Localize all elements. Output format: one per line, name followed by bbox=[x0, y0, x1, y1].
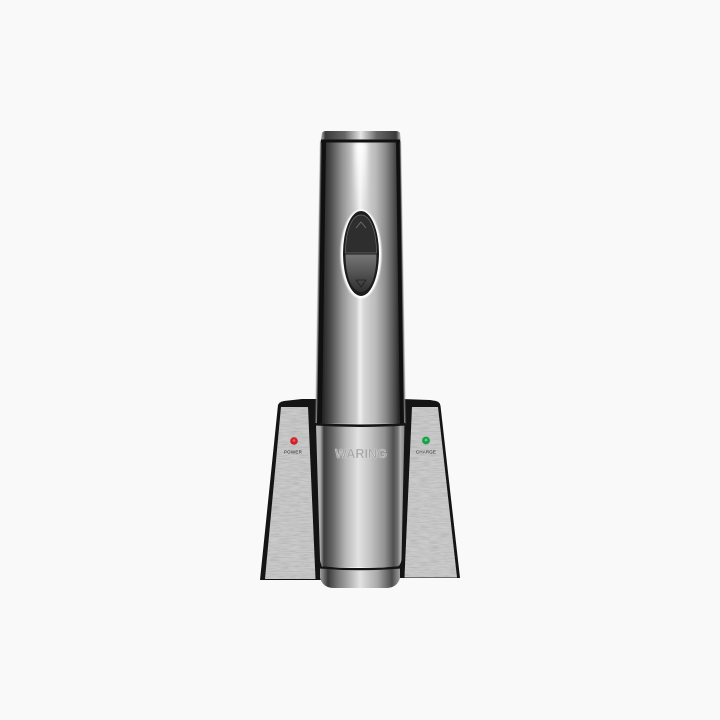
power label: POWER bbox=[284, 450, 302, 454]
lower button half bbox=[346, 254, 376, 292]
up arrow bbox=[356, 222, 366, 228]
power indicator light bbox=[290, 437, 298, 445]
left base black housing bbox=[260, 399, 322, 580]
lower steel sleeve bbox=[316, 424, 404, 567]
right base black housing bbox=[398, 399, 460, 578]
down arrow bbox=[356, 280, 366, 287]
button surround bbox=[343, 211, 379, 296]
left black edge bbox=[317, 142, 326, 424]
left charging base bbox=[260, 399, 322, 580]
charge label: CHARGE bbox=[416, 450, 436, 454]
oval control button bbox=[340, 210, 382, 298]
upper button half bbox=[346, 215, 376, 253]
charge indicator light bbox=[422, 437, 430, 444]
right base brushed plate bbox=[404, 407, 457, 578]
upper steel body bbox=[316, 141, 406, 424]
right black edge bbox=[396, 142, 404, 424]
foot ring bbox=[319, 566, 401, 588]
opener body bbox=[315, 131, 406, 588]
top highlight bbox=[354, 142, 367, 232]
right charging base bbox=[398, 399, 460, 578]
embossed brand name: WARING bbox=[335, 446, 387, 461]
top cap bbox=[320, 131, 401, 142]
sleeve joint line bbox=[315, 423, 406, 427]
left base brushed plate bbox=[265, 407, 316, 579]
button halo bbox=[340, 210, 382, 298]
